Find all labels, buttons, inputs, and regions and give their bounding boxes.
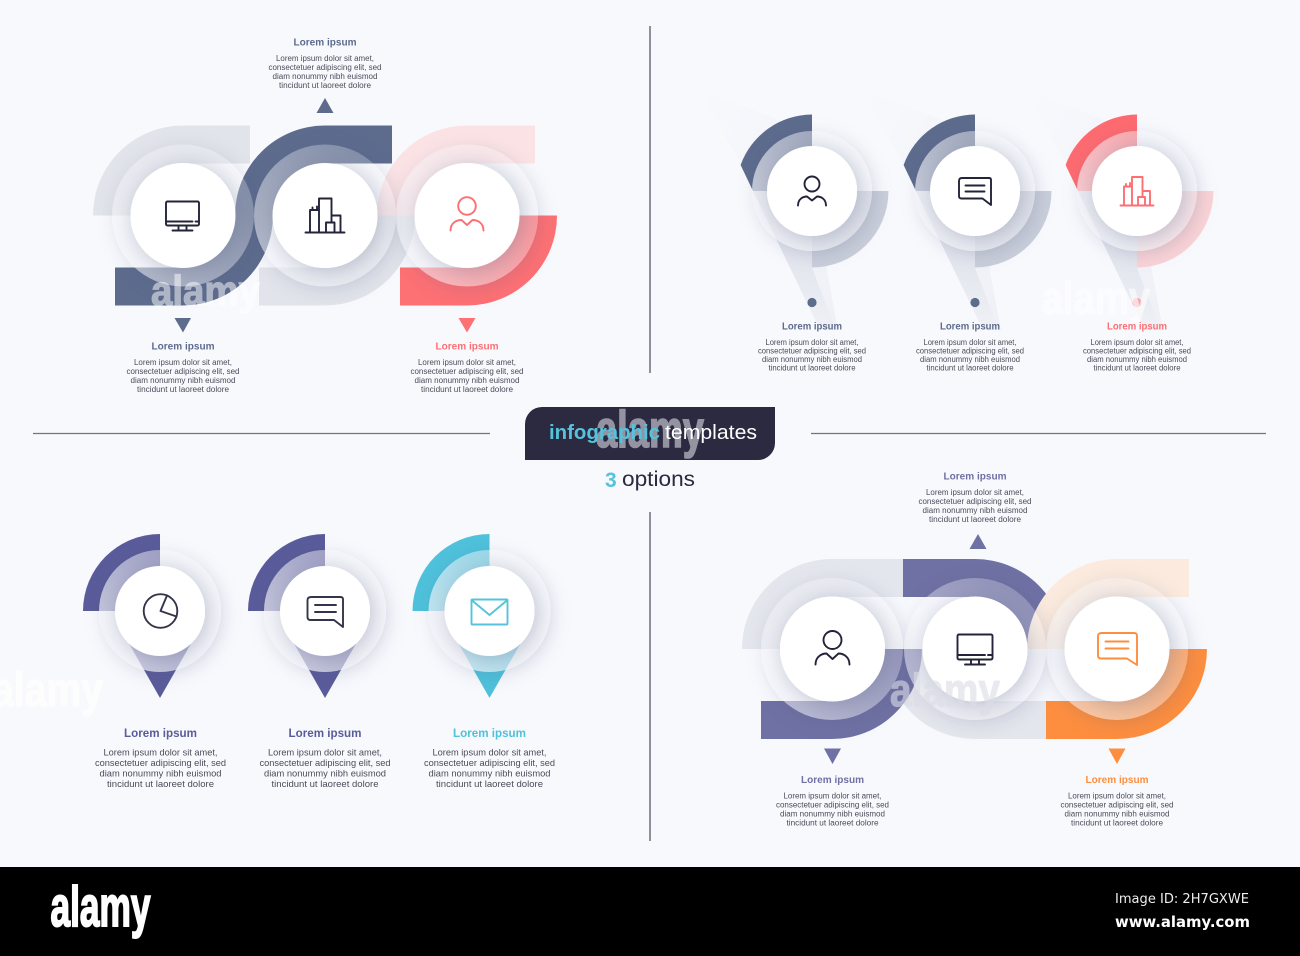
- band: slate lower: [115, 216, 273, 306]
- text block: option 2 third: [1083, 322, 1191, 372]
- text block: option 2 second: tincidunt ut laoreet dolore: [926, 364, 1014, 372]
- text block: option 1 left: tincidunt ut laoreet dolore: [137, 385, 230, 394]
- footer bar: [0, 867, 1300, 956]
- node disc 1: [130, 163, 236, 268]
- tail shadow: [916, 191, 999, 330]
- text block: option 3 first: [95, 726, 226, 789]
- text block: option 1 left: diam nonummy nibh euismod: [130, 376, 236, 385]
- text block: option 4 right: consectetuer adipiscing elit, sed: [1060, 800, 1174, 810]
- text block: option 1 top: [268, 38, 382, 90]
- icon: chat: [959, 178, 991, 205]
- tail shadow: [1078, 191, 1161, 330]
- icon: buildings: [306, 198, 344, 232]
- text block: option 3 third: [424, 726, 555, 789]
- text block: option 3 second: Lorem ipsum dolor sit amet,: [268, 748, 382, 758]
- arc: indigo: [83, 534, 160, 611]
- node ring 2: [904, 578, 1046, 720]
- footer url: www.alamy.com: [1115, 913, 1250, 931]
- text block: option 4 right: [1060, 775, 1174, 828]
- disc: [444, 566, 534, 656]
- faint streak: [1025, 90, 1163, 330]
- text block: option 1 right: Lorem ipsum dolor sit amet,: [418, 358, 516, 367]
- text block: option 1 top: Lorem ipsum dolor sit amet,: [276, 54, 374, 63]
- text block: option 3 second: diam nonummy nibh euismod: [264, 768, 386, 778]
- banner text: infographic: infographic: [549, 422, 660, 444]
- band: gray lower: [885, 649, 1046, 739]
- arc: cyan: [412, 534, 490, 611]
- text block: option 3 first: diam nonummy nibh euismod: [100, 768, 222, 778]
- node disc 3: [414, 163, 520, 268]
- band: gray lower: [259, 216, 415, 306]
- panel: option 2 pin 1: [700, 90, 888, 330]
- text block: option 4 top: Lorem ipsum: [944, 472, 1006, 482]
- node ring 3: [1046, 578, 1188, 720]
- band: peach upper: [1027, 559, 1189, 649]
- text block: option 2 second: diam nonummy nibh euismod: [920, 355, 1020, 364]
- icon: person coral: [450, 197, 484, 230]
- arc: gray lower right: [975, 191, 1052, 268]
- text block: option 1 top: diam nonummy nibh euismod: [272, 72, 378, 81]
- icon: monitor: [958, 634, 992, 664]
- text block: option 1 top: tincidunt ut laoreet dolore: [279, 81, 372, 90]
- text block: option 1 right: Lorem ipsum: [436, 342, 498, 352]
- text block: option 3 first: Lorem ipsum dolor sit amet,: [104, 748, 218, 758]
- ring: [1077, 131, 1197, 251]
- arrow: option 1 left down: [174, 318, 191, 332]
- text block: option 2 second: Lorem ipsum: [940, 322, 1000, 332]
- watermark: lower right: alamy: [890, 664, 1000, 716]
- text block: option 1 left: consectetuer adipiscing elit, sed: [126, 367, 240, 376]
- band: purple top: [903, 559, 1065, 649]
- subtitle: 3 options: 3: [605, 469, 617, 492]
- panel: option 2 pin 3: [1025, 90, 1214, 330]
- node disc 2: [272, 163, 378, 268]
- text block: option 3 third: consectetuer adipiscing elit, sed: [424, 758, 555, 768]
- icon: envelope: [472, 600, 508, 624]
- arrow: option 4 right down: [1108, 748, 1126, 764]
- text block: option 4 top: diam nonummy nibh euismod: [922, 506, 1028, 515]
- tail shadow: [753, 191, 836, 330]
- subtitle: 3 options: options: [622, 468, 695, 491]
- band: purple lower: [761, 649, 922, 739]
- node ring 2: [254, 144, 396, 286]
- pointer: [292, 640, 358, 698]
- text block: option 4 left: Lorem ipsum: [801, 775, 864, 786]
- text block: option 3 third: Lorem ipsum: [453, 726, 526, 740]
- band: gray upper left: [742, 559, 903, 649]
- text block: option 1 top: consectetuer adipiscing elit, sed: [268, 63, 382, 72]
- text block: option 4 left: [776, 775, 889, 828]
- node disc 3: [1064, 596, 1170, 702]
- text block: option 2 first: consectetuer adipiscing elit, sed: [758, 346, 866, 356]
- panel: option 3 pin 2: [248, 534, 386, 698]
- node ring 1: [112, 144, 254, 286]
- footer logo: alamy: [50, 875, 151, 939]
- text block: option 2 first: tincidunt ut laoreet dolore: [768, 364, 856, 372]
- faint streak: [700, 90, 838, 330]
- icon: pie chart: [144, 594, 177, 628]
- pointer: [127, 640, 193, 698]
- ring: [99, 550, 221, 672]
- text block: option 3 third: diam nonummy nibh euismod: [428, 768, 550, 778]
- band: slate upper: [235, 126, 392, 216]
- text block: option 3 third: Lorem ipsum dolor sit amet,: [432, 748, 546, 758]
- text block: option 2 second: consectetuer adipiscing elit, sed: [916, 346, 1024, 356]
- text block: option 2 first: diam nonummy nibh euismod: [762, 355, 862, 364]
- arc: indigo: [248, 534, 325, 611]
- ring: [915, 131, 1035, 251]
- divider: left horizontal: [33, 432, 490, 434]
- text block: option 4 top: [918, 472, 1032, 524]
- icon: buildings coral: [1120, 177, 1154, 206]
- arrow: option 1 top: [316, 98, 334, 113]
- text block: option 3 first: consectetuer adipiscing elit, sed: [95, 758, 226, 768]
- faint streak: [863, 90, 1001, 330]
- icon: person: [798, 176, 826, 206]
- text block: option 1 right: [410, 342, 524, 394]
- arc: slate upper: [741, 114, 812, 191]
- node ring 1: [761, 578, 903, 720]
- text block: option 4 right: diam nonummy nibh euismod: [1064, 810, 1170, 818]
- ring: [752, 131, 872, 251]
- text block: option 4 right: Lorem ipsum: [1086, 775, 1148, 786]
- disc: [1092, 146, 1182, 236]
- banner text: templates: templates: [665, 422, 757, 444]
- text block: option 4 right: tincidunt ut laoreet dolore: [1071, 818, 1164, 828]
- text block: option 2 second: Lorem ipsum dolor sit amet,: [924, 338, 1016, 347]
- dot: [970, 298, 980, 307]
- text block: option 1 right: consectetuer adipiscing elit, sed: [410, 367, 524, 376]
- ring: [428, 550, 550, 672]
- panel: option 1 S-curve timeline: [93, 126, 557, 306]
- panel: option 4 wave timeline: [742, 559, 1207, 739]
- icon: chat: [308, 597, 343, 627]
- text block: option 1 left: Lorem ipsum dolor sit amet,: [134, 358, 232, 367]
- icon: person: [816, 631, 850, 664]
- text block: option 2 second: [916, 322, 1024, 372]
- text block: option 3 third: tincidunt ut laoreet dolore: [436, 779, 543, 789]
- text block: option 4 left: diam nonummy nibh euismod: [780, 810, 885, 818]
- node disc 1: [780, 596, 885, 702]
- node disc 2: [922, 596, 1028, 702]
- band: coral lower: [400, 216, 557, 306]
- text block: option 3 first: Lorem ipsum: [124, 726, 197, 740]
- text block: option 1 top: Lorem ipsum: [294, 38, 356, 48]
- text block: option 4 left: tincidunt ut laoreet dolore: [786, 818, 879, 828]
- arrow: option 1 right down: [458, 318, 476, 332]
- text block: option 3 second: consectetuer adipiscing elit, sed: [260, 758, 390, 768]
- arc: gray lower right: [812, 191, 888, 268]
- text block: option 3 second: [260, 726, 390, 789]
- arrow: option 4 left down: [824, 748, 841, 764]
- text block: option 2 third: tincidunt ut laoreet dolore: [1094, 364, 1181, 372]
- disc: [767, 146, 857, 236]
- disc: [930, 146, 1020, 236]
- text block: option 2 third: Lorem ipsum dolor sit amet,: [1090, 338, 1184, 347]
- text block: option 1 right: tincidunt ut laoreet dolore: [421, 385, 514, 394]
- node ring 3: [396, 144, 538, 286]
- panel: option 3 pin 1: [83, 534, 221, 698]
- title banner: [525, 401, 775, 460]
- text block: option 2 third: Lorem ipsum: [1107, 322, 1167, 332]
- text block: option 2 first: Lorem ipsum: [782, 322, 842, 332]
- arc: pink lower right: [1137, 191, 1214, 268]
- band: gray upper left: [93, 126, 250, 216]
- pointer: [456, 640, 522, 698]
- text block: option 4 top: Lorem ipsum dolor sit amet,: [926, 488, 1024, 497]
- icon: chat orange: [1098, 633, 1137, 665]
- text block: option 2 first: Lorem ipsum dolor sit amet,: [766, 338, 858, 347]
- text block: option 3 second: Lorem ipsum: [288, 726, 362, 740]
- panel: option 2 pin 2: [863, 90, 1052, 330]
- text block: option 4 left: Lorem ipsum dolor sit amet,: [784, 792, 882, 800]
- text block: option 4 top: consectetuer adipiscing elit, sed: [918, 497, 1032, 506]
- icon: monitor: [166, 202, 199, 230]
- text block: option 4 right: Lorem ipsum dolor sit amet,: [1068, 792, 1166, 800]
- text block: option 4 left: consectetuer adipiscing elit, sed: [776, 800, 889, 810]
- banner shape: [525, 407, 775, 460]
- divider: right horizontal: [811, 432, 1266, 434]
- watermark: centre: alamy: [596, 401, 704, 459]
- text block: option 4 top: tincidunt ut laoreet dolore: [929, 515, 1022, 524]
- divider: top vertical: [649, 26, 651, 373]
- band: orange lower: [1046, 649, 1207, 739]
- arrow: option 4 top: [970, 534, 986, 549]
- footer image id: Image ID: 2H7GXWE: [1115, 892, 1249, 907]
- watermark: upper left: alamy: [151, 267, 261, 314]
- text block: option 2 third: consectetuer adipiscing elit, sed: [1083, 346, 1191, 356]
- divider: bottom vertical: [649, 512, 651, 841]
- text block: option 1 left: [126, 342, 240, 394]
- text block: option 1 left: Lorem ipsum: [152, 342, 214, 352]
- arc: slate upper: [904, 114, 975, 191]
- text block: option 3 first: tincidunt ut laoreet dolore: [107, 779, 214, 789]
- disc: [115, 566, 205, 656]
- text block: option 1 right: diam nonummy nibh euismod: [414, 376, 520, 385]
- disc: [280, 566, 370, 656]
- dot: [1132, 298, 1142, 307]
- ring: [264, 550, 386, 672]
- panel: option 3 pin 3: [412, 534, 550, 698]
- text block: option 2 third: diam nonummy nibh euismod: [1087, 355, 1187, 364]
- text block: option 3 second: tincidunt ut laoreet dolore: [272, 779, 378, 789]
- watermark: upper right: alamy: [1042, 272, 1150, 324]
- text block: option 2 first: [758, 322, 866, 372]
- dot: [807, 298, 817, 307]
- band: pink upper: [377, 126, 535, 216]
- arc: coral upper: [1066, 114, 1137, 191]
